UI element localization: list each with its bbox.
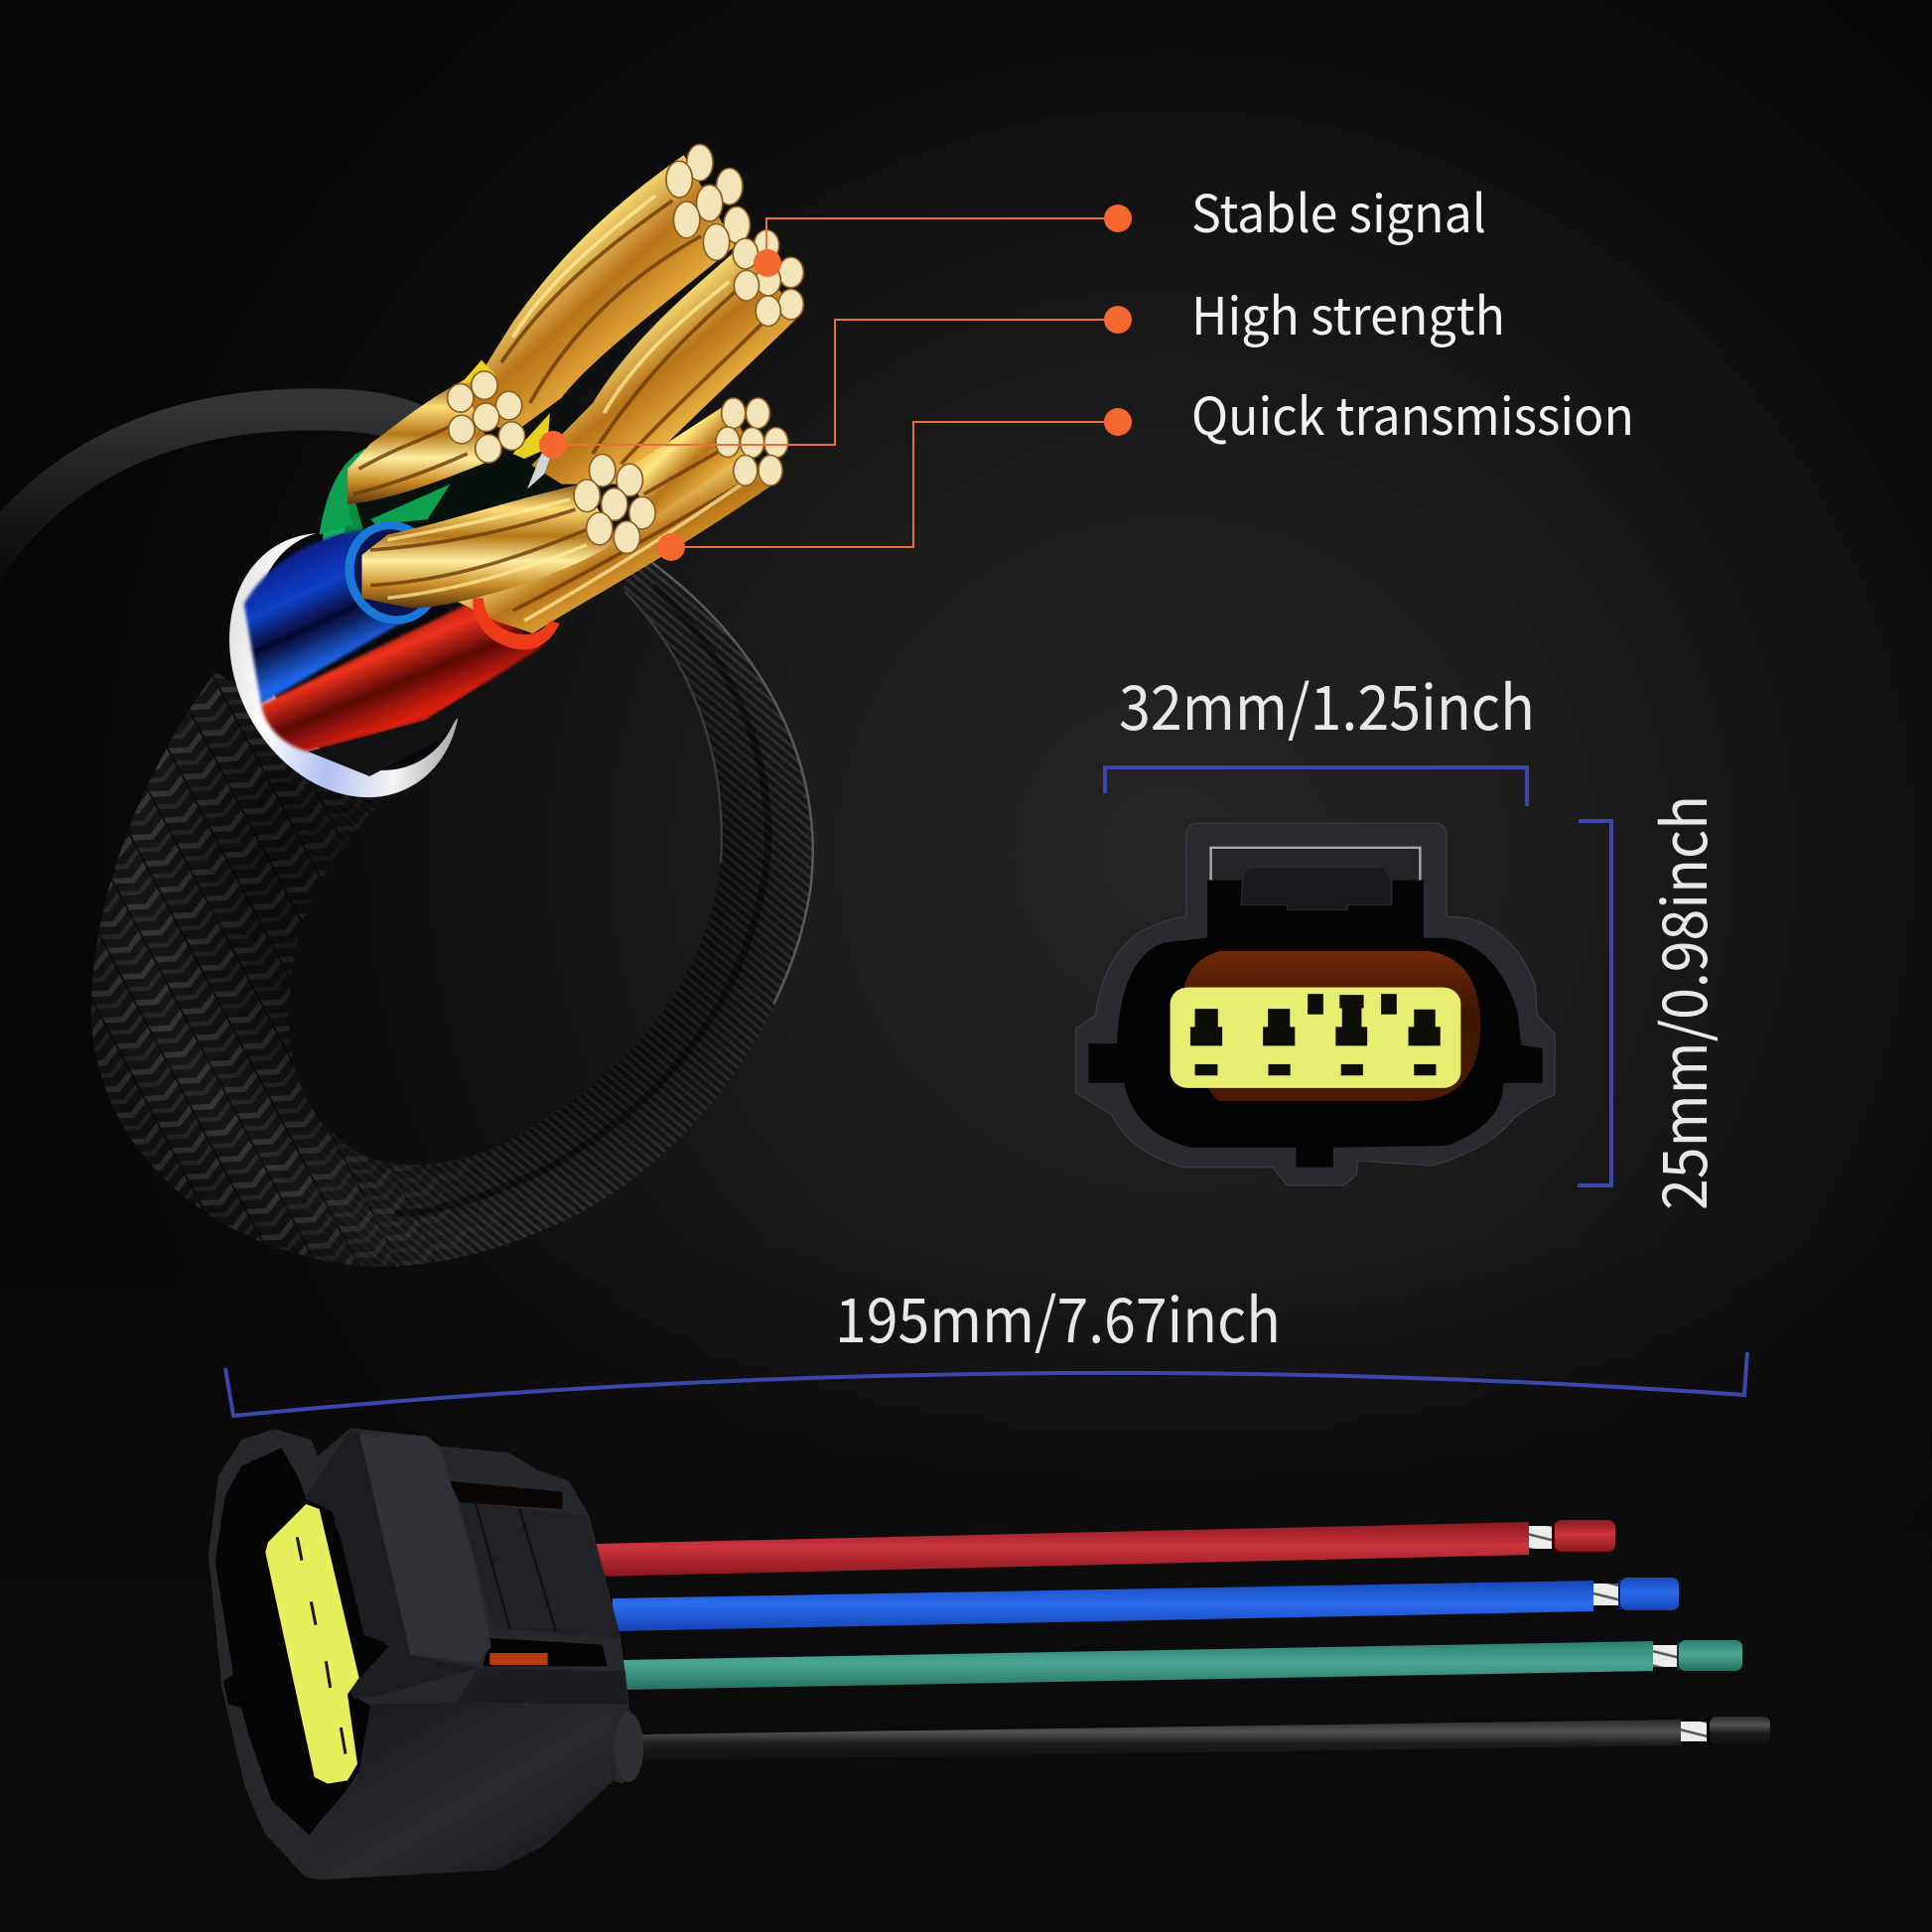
dimension: connector height: 25mm/0.98inch (1635, 795, 1725, 1210)
side latch (460, 1502, 621, 1638)
callout: quick transmission: Quick transmission (1191, 375, 1634, 450)
cable: rear thin section (0, 409, 469, 579)
copper strand shading (353, 201, 763, 611)
side lower shell (311, 1703, 616, 1879)
callout: high strength: High strength (1191, 275, 1505, 349)
connector clip window (1211, 848, 1420, 880)
side strap lip (306, 1428, 479, 1700)
copper strand ends: top (666, 144, 750, 260)
callout: quick transmission (657, 375, 1634, 561)
blue core ring (342, 519, 445, 626)
side cavity (215, 1448, 390, 1835)
cable illustration (0, 144, 813, 1267)
callout: stable signal (754, 173, 1486, 277)
dimension: connector width: 32mm/1.25inch (1119, 658, 1535, 748)
side strap face (359, 1433, 491, 1663)
side orange seal (489, 1653, 548, 1665)
copper strand ends: upper right (716, 398, 788, 485)
connector seal (1184, 951, 1480, 1101)
dimension: connector height (1578, 795, 1725, 1210)
yellow core sleeve (462, 360, 550, 459)
wire: blue (613, 1578, 1679, 1631)
side latch groove (475, 1501, 556, 1631)
wire: red (596, 1520, 1615, 1577)
dimension: total length (225, 1271, 1747, 1416)
dimension: connector width (1105, 658, 1535, 806)
connector cavity (1088, 880, 1543, 1168)
copper strand ends: second (733, 230, 803, 326)
side lower window (483, 1638, 608, 1666)
green core sleeve (319, 449, 450, 535)
side housing (208, 1428, 642, 1879)
wire: black (642, 1717, 1770, 1760)
side rear boss (614, 1713, 643, 1782)
connector yellow insert (1171, 987, 1460, 1088)
callout: high strength (539, 275, 1505, 459)
silver glint (527, 449, 553, 489)
connector housing (1076, 823, 1555, 1185)
copper strand ends: centre (574, 455, 655, 553)
dimension: total length: 195mm/7.67inch (835, 1271, 1281, 1360)
copper bundle: top (433, 155, 735, 434)
cable: metal collar and coloured cores (185, 454, 542, 838)
connector front view (1076, 823, 1555, 1185)
copper bundle: centre (361, 484, 619, 609)
cable: braided loop (91, 554, 813, 1267)
copper bundle: left (347, 383, 495, 504)
wires (596, 1520, 1770, 1760)
side inner block (335, 1504, 410, 1651)
cable: copper bundles (319, 144, 803, 649)
red core ring (473, 598, 560, 649)
connector side view (208, 1428, 643, 1879)
side upper window (449, 1481, 563, 1509)
connector latch (1241, 867, 1392, 909)
side lower ledge (457, 1668, 627, 1705)
callout: stable signal: Stable signal (1191, 173, 1486, 247)
copper strand highlights (387, 196, 753, 621)
copper bundle: second (513, 246, 800, 484)
wire: green (623, 1640, 1742, 1690)
copper bundle: lower long (450, 464, 780, 633)
copper bundle: upper right (626, 400, 753, 519)
callouts (539, 173, 1634, 561)
copper strand ends: left (448, 371, 525, 463)
side yellow insert (265, 1504, 359, 1784)
dark core behind the left bundle (353, 454, 570, 535)
